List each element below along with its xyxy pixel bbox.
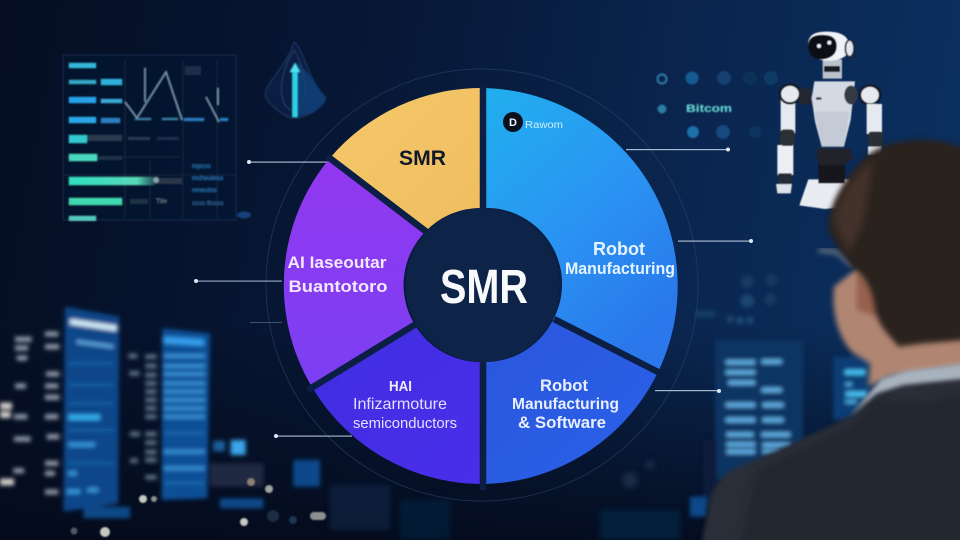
- person: neck and face: [833, 263, 960, 387]
- segment: yellow SMR: SMR: [399, 147, 446, 170]
- robot torso: [812, 81, 855, 147]
- city lights: bokeh: [70, 478, 326, 537]
- skyline: bottom centre blocks: [330, 460, 680, 540]
- badge: small logo: Rawom: [525, 120, 563, 131]
- hub: center SMR: SMR: [440, 261, 528, 314]
- chart caption text: [192, 163, 224, 207]
- hub: center SMR: [406, 208, 560, 362]
- chart: dashboard panel: Ttle: [156, 198, 167, 205]
- segment: indigo AI infrastructure: Infizarmoture: [353, 396, 447, 413]
- person: suit: [702, 363, 960, 540]
- segment: royal blue robot software: Robot: [540, 377, 588, 395]
- person: glasses: [818, 250, 853, 267]
- segment: blue robot manufacturing: Robot: [593, 239, 645, 259]
- skyline: left buildings: [0, 307, 320, 518]
- segment: purple AI: Buantotoro: [288, 277, 388, 296]
- robot neck: [823, 59, 842, 79]
- icon: upward arrow shield: [265, 42, 326, 118]
- panel: pie wheel: [284, 86, 678, 490]
- badge: small logo: D: [509, 117, 517, 129]
- icons: faint dot cluster with label: [658, 71, 778, 139]
- robot arms: [781, 100, 795, 133]
- segment: royal blue robot software: [483, 320, 658, 484]
- segment: indigo AI infrastructure: [312, 325, 483, 484]
- chart: dashboard panel: [63, 55, 251, 221]
- badge: small logo: [503, 112, 563, 132]
- leader lines: [194, 148, 753, 438]
- person: man viewed from behind: [702, 140, 960, 540]
- icons: faint dot cluster with label: Bitcom: [686, 103, 732, 115]
- segment: indigo AI infrastructure: HAI: [389, 378, 412, 395]
- skyline: right panel building: [690, 274, 870, 517]
- robot head: [808, 32, 849, 61]
- decor: outer ring: [266, 69, 698, 501]
- segment: purple AI: AI Iaseoutar: [288, 253, 387, 272]
- chart caption text: nmeutss: [192, 187, 217, 194]
- icon: humanoid robot: [776, 32, 883, 209]
- segment: yellow SMR: [330, 88, 483, 231]
- segment: blue robot manufacturing: Manufacturing: [565, 260, 675, 278]
- segment: blue robot manufacturing: [483, 88, 678, 372]
- person: collar: [850, 363, 960, 416]
- chart caption text: ssss 8ssss: [192, 200, 224, 207]
- chart caption text: mpcss: [192, 163, 212, 170]
- robot base: [799, 179, 850, 209]
- segment: royal blue robot software: Manufacturing: [512, 396, 619, 413]
- segment: royal blue robot software: & Software: [518, 414, 606, 432]
- segment: purple AI: [284, 158, 426, 387]
- person: hair: [828, 140, 960, 347]
- segment: indigo AI infrastructure: semiconductors: [353, 416, 457, 432]
- chart caption text: mcheuless: [192, 175, 224, 182]
